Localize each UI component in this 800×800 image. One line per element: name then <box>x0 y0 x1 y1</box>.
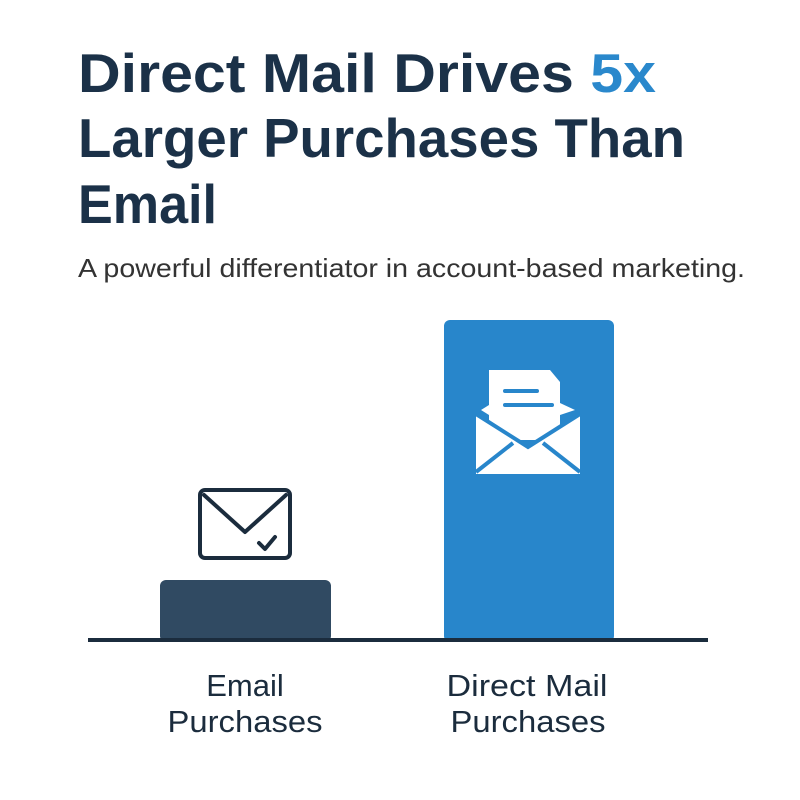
subtitle: A powerful differentiator in account-based marketing. <box>78 253 745 283</box>
label: direct mail purchases <box>446 668 608 739</box>
title: Direct Mail Drives 5x <box>78 42 656 104</box>
bar: email <box>160 580 331 642</box>
label: email purchases <box>168 668 322 739</box>
label: direct mail purchases: Purchases <box>450 704 606 739</box>
axis line <box>88 638 708 642</box>
label: email purchases: Purchases <box>168 704 322 739</box>
bar chart <box>88 320 708 642</box>
label: direct mail purchases: Direct Mail <box>446 668 608 703</box>
bar: direct mail <box>444 320 614 642</box>
title: Email <box>78 173 217 235</box>
title: Larger Purchases Than <box>78 107 685 169</box>
title <box>78 42 685 235</box>
icon: open envelope with letter <box>476 370 580 474</box>
label: email purchases: Email <box>206 668 284 703</box>
icon: email with check <box>200 490 290 558</box>
